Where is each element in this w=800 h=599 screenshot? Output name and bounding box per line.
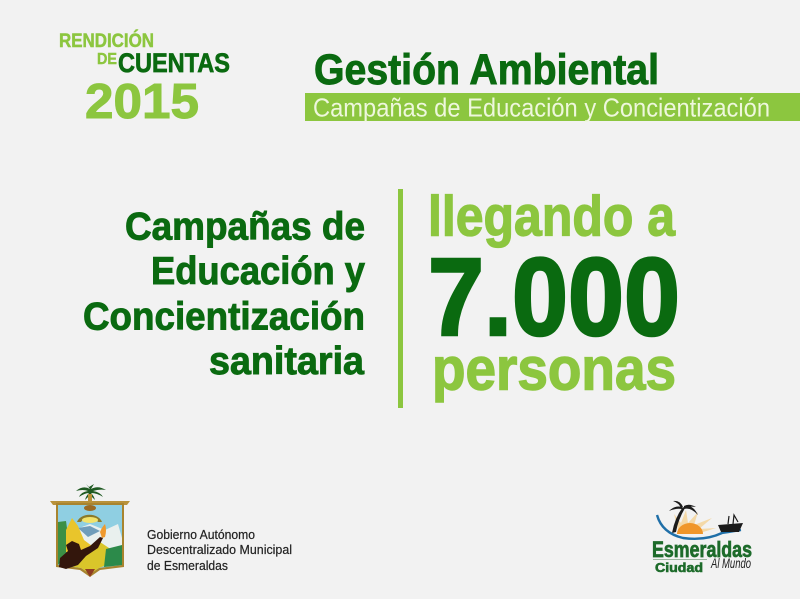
- torch flame: [100, 524, 106, 538]
- green field: [104, 545, 122, 567]
- subtitle band: Campañas de Educación y Concientización: [313, 92, 770, 122]
- icon: coat of arms: [50, 484, 130, 577]
- orange knot: [84, 505, 96, 511]
- logo: Esmeraldas Ciudad Al Mundo: Ciudad: [655, 560, 703, 575]
- text block: campaign title: sanitaria: [209, 340, 364, 383]
- text block: institution name: [147, 528, 292, 573]
- green left slope: [58, 521, 70, 565]
- palm: [669, 501, 698, 533]
- palm tree: [76, 484, 106, 502]
- boat: [718, 515, 743, 532]
- text block: campaign title: Campañas de: [125, 206, 365, 248]
- callout: llegando a 7.000 personas: llegando a: [428, 184, 676, 248]
- wordmark: Esmeraldas: [652, 537, 752, 562]
- logo: Esmeraldas Ciudad Al Mundo: Al Mundo: [710, 555, 751, 571]
- logo: Rendición de Cuentas 2015: DE: [97, 51, 117, 68]
- heading: Gestión Ambiental: Gestión Ambiental: [314, 46, 659, 94]
- shield top bar: [50, 501, 130, 505]
- callout: llegando a 7.000 personas: 7.000: [428, 236, 680, 359]
- text block: campaign title: Educación y: [151, 250, 365, 293]
- text block: campaign title: Concientización: [83, 296, 365, 338]
- waves: [657, 515, 741, 539]
- figure: [59, 537, 103, 569]
- distant hills: [74, 524, 122, 560]
- flowered field: [68, 542, 112, 574]
- sky: [58, 505, 122, 574]
- shield frame: [56, 503, 124, 577]
- yellow mountain: [66, 518, 92, 552]
- text block: campaign title: [83, 206, 365, 383]
- logo: Esmeraldas Ciudad Al Mundo: [652, 501, 752, 575]
- sun rays: [674, 510, 716, 533]
- callout: llegando a 7.000 personas: [428, 184, 680, 402]
- text block: institution name: Descentralizado Municipal: [147, 543, 292, 557]
- logo: Rendición de Cuentas 2015: RENDICIÓN: [59, 30, 154, 52]
- logo: Rendición de Cuentas 2015: [59, 30, 230, 129]
- yellow arc banner: [77, 515, 102, 522]
- logo: Rendición de Cuentas 2015: 2015: [85, 75, 199, 129]
- rule: [653, 559, 707, 560]
- text block: institution name: Gobierno Autónomo: [147, 528, 255, 542]
- base ornament: [85, 569, 95, 577]
- sun: [677, 523, 703, 534]
- callout: llegando a 7.000 personas: personas: [432, 336, 676, 402]
- logo: Rendición de Cuentas 2015: CUENTAS: [118, 48, 230, 78]
- text block: institution name: de Esmeraldas: [147, 559, 228, 573]
- vertical divider: [398, 189, 403, 408]
